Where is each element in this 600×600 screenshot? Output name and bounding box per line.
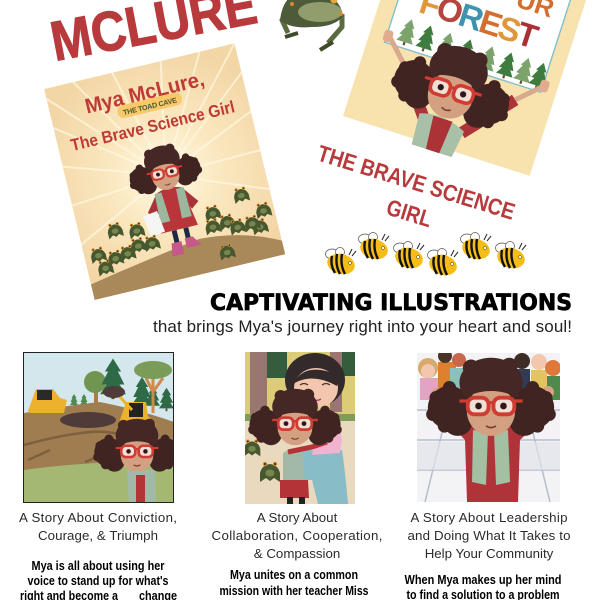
panel: collaboration: mission with her teacher Miss xyxy=(220,583,368,598)
caption: A Story About Leadership xyxy=(410,510,568,525)
icon: large toad xyxy=(280,0,343,50)
bees row xyxy=(325,232,527,278)
poster: Save our forest xyxy=(341,0,592,182)
panel: collaboration: & Compassion xyxy=(254,546,340,561)
illustration: celebrating xyxy=(417,349,561,502)
cover title: The Brave Science Girl xyxy=(69,97,237,155)
caption: A Story About xyxy=(257,510,338,525)
panel: conviction: voice to stand up for what's xyxy=(28,573,168,588)
panel: collaboration: Collaboration, Cooperation, xyxy=(212,528,382,543)
sign trees xyxy=(395,17,552,91)
poster girl xyxy=(354,23,552,179)
panel: leadership xyxy=(404,349,570,600)
panel: leadership: and Doing What It Takes to xyxy=(408,528,570,543)
cover girl xyxy=(130,144,202,256)
panel: conviction: Courage, & Triumph xyxy=(38,528,158,543)
description: Mya is all about using her xyxy=(32,558,164,573)
panel: leadership: Help Your Community xyxy=(425,546,554,561)
tagline: that brings Mya's journey right into your heart and soul! xyxy=(153,317,572,336)
heading: CAPTIVATING ILLUSTRATIONS xyxy=(210,291,572,316)
illustration: bulldozers xyxy=(24,352,181,503)
description: Mya unites on a common xyxy=(230,567,358,582)
caption: A Story About Conviction, xyxy=(19,510,177,525)
cover title xyxy=(70,76,234,150)
cover toads xyxy=(91,186,272,276)
illustration: teacher hug xyxy=(244,352,355,505)
protest sign xyxy=(385,0,578,92)
subtitle: The Brave Science Girl: GIRL xyxy=(384,194,435,232)
panel: conviction xyxy=(19,352,181,600)
subtitle: The Brave Science Girl: THE BRAVE SCIENCE xyxy=(315,140,518,225)
crowd xyxy=(418,349,561,400)
panel: collaboration xyxy=(212,352,382,598)
cover title: Mya McLure, xyxy=(83,68,207,119)
cover sun rays xyxy=(44,43,272,245)
cover ground xyxy=(91,235,286,300)
book cover: The Toad Cave xyxy=(44,43,285,300)
cover subtitle pill: THE TOAD CAVE xyxy=(122,95,178,117)
description: When Mya makes up her mind xyxy=(404,572,562,587)
